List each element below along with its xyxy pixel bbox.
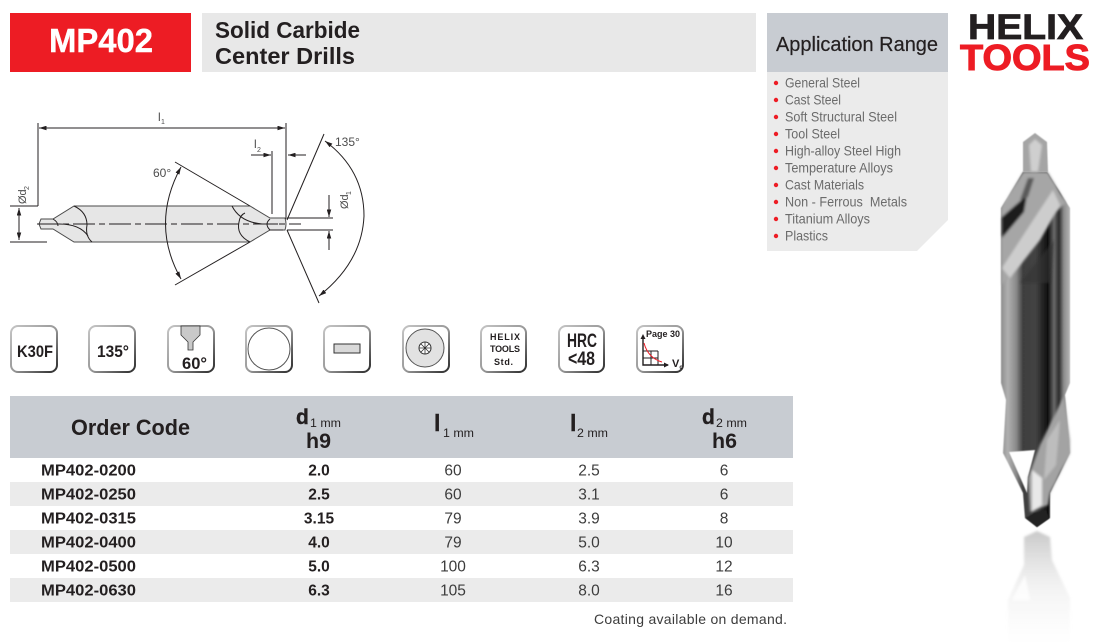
table rows: 8.0 <box>578 582 600 600</box>
icon: K30F: K30F <box>17 343 53 361</box>
dimension l1: 1 <box>161 119 165 126</box>
table header: h6 <box>712 430 737 453</box>
table rows: 3.9 <box>578 510 600 528</box>
table rows: 60 <box>444 486 462 504</box>
title banner: Center Drills <box>215 43 355 69</box>
product code badge: MP402 <box>49 22 153 59</box>
table rows: 3.1 <box>578 486 600 504</box>
footnote: Coating available on demand. <box>594 611 787 627</box>
icon: cross section <box>403 326 449 372</box>
icon: 60 degrees: 60° <box>182 355 207 373</box>
table rows: 16 <box>715 582 733 600</box>
icon: cutting speed chart, page 30: Page 30 <box>646 329 680 340</box>
table rows: 3.15 <box>304 510 334 528</box>
icon: cylindrical shank <box>324 326 370 372</box>
icon: cutting speed chart, page 30 <box>637 326 683 372</box>
angle 60 degrees: 60° <box>153 166 171 180</box>
table rows: 4.0 <box>308 534 330 552</box>
list: materials <box>774 74 907 244</box>
drill body <box>1001 172 1070 527</box>
dimension l2: l <box>254 137 257 151</box>
table header: 2 mm <box>716 416 747 430</box>
table rows: 2.5 <box>578 462 600 480</box>
drill neck <box>1023 133 1048 172</box>
table header: 1 mm <box>310 416 341 430</box>
table rows: 100 <box>440 558 466 576</box>
icon: 135 degrees: 135° <box>97 343 129 361</box>
table rows: 60 <box>444 462 462 480</box>
title banner: Solid Carbide <box>215 17 360 43</box>
table rows: 79 <box>444 534 462 552</box>
table header: h9 <box>306 430 331 453</box>
table rows: 8 <box>720 510 728 528</box>
angle 135 degrees: 135° <box>335 135 360 149</box>
angle 135 degrees <box>287 134 364 303</box>
list: materials: Soft Structural Steel <box>785 108 897 124</box>
technical drawing: center drill <box>10 110 364 303</box>
table header: 2 mm <box>577 426 608 440</box>
dimension d1 <box>287 191 353 250</box>
list: materials: Cast Materials <box>785 176 864 192</box>
dimension l1 <box>38 110 286 219</box>
table rows <box>10 462 793 602</box>
table rows: 12 <box>715 558 733 576</box>
table rows: 105 <box>440 582 466 600</box>
table header: d <box>296 406 309 429</box>
table header: l <box>434 410 440 436</box>
list: materials: High-alloy Steel High <box>785 142 901 158</box>
table: order data <box>10 396 793 602</box>
panel: application range <box>767 13 948 251</box>
table rows: MP402-0250 <box>41 486 136 504</box>
table rows: MP402-0500 <box>41 558 136 576</box>
logo: helix tools: HELIX <box>968 8 1084 47</box>
table header <box>10 396 793 458</box>
heading: application range: Application Range <box>776 33 938 56</box>
angle 60 degrees <box>153 162 250 285</box>
dimension l1: l <box>158 110 161 124</box>
icon: helix tools standard: TOOLS <box>490 344 520 354</box>
list: materials: Temperature Alloys <box>785 160 893 176</box>
icon: HRC below 48 <box>559 326 604 372</box>
table rows: MP402-0400 <box>41 534 136 552</box>
icon: 135 degrees <box>89 326 135 372</box>
dimension d2 <box>10 186 47 242</box>
table rows: MP402-0200 <box>41 462 136 480</box>
table rows: 6.3 <box>308 582 330 600</box>
dimension d1: Ød <box>339 194 351 209</box>
table header: l <box>570 410 576 436</box>
logo: helix tools <box>960 8 1090 78</box>
table rows: 6.3 <box>578 558 600 576</box>
dimension l2 <box>251 137 306 214</box>
icon: cutting speed chart, page 30: c <box>679 365 683 371</box>
table rows: 10 <box>715 534 733 552</box>
icon: helix tools standard: HELIX <box>490 332 520 342</box>
drill body <box>39 206 286 242</box>
dimension d2: 2 <box>24 186 31 190</box>
icon: cutting speed chart, page 30: V <box>672 358 679 370</box>
icon: K30F <box>11 326 57 372</box>
table rows: 79 <box>444 510 462 528</box>
icon row: properties <box>11 326 683 373</box>
white gap at tip end <box>1009 450 1035 493</box>
table rows: 2.0 <box>308 462 330 480</box>
table header: d <box>702 406 715 429</box>
dimension l2: 2 <box>257 147 261 154</box>
icon: HRC below 48: <48 <box>568 348 595 370</box>
icon: round shank <box>246 326 292 372</box>
table rows: 5.0 <box>308 558 330 576</box>
icon: helix tools standard <box>481 326 526 372</box>
list: materials: General Steel <box>785 74 860 90</box>
table header: Order Code <box>71 415 190 440</box>
list: materials: Cast Steel <box>785 92 841 108</box>
table rows: 5.0 <box>578 534 600 552</box>
drill tip <box>1026 510 1049 527</box>
list: materials: Plastics <box>785 228 828 244</box>
photo: solid carbide center drill <box>1001 133 1070 642</box>
table rows: 6 <box>720 486 728 504</box>
swirl at tip end <box>1028 396 1070 512</box>
product code badge <box>10 13 191 72</box>
list: materials: Tool Steel <box>785 126 840 142</box>
icon: HRC below 48: HRC <box>567 330 597 352</box>
table rows: 6 <box>720 462 728 480</box>
title banner <box>202 13 756 72</box>
dimension d2: Ød <box>17 189 29 204</box>
dimension d1: 1 <box>346 191 353 195</box>
icon: helix tools standard: Std. <box>494 357 513 367</box>
swirl at shank end <box>1002 172 1066 285</box>
table header: 1 mm <box>443 426 474 440</box>
list: materials: Titanium Alloys <box>785 210 870 226</box>
list: materials: Non - Ferrous Metals <box>785 194 907 210</box>
logo: helix tools: TOOLS <box>960 37 1090 78</box>
table rows: MP402-0630 <box>41 582 136 600</box>
table rows: 2.5 <box>308 486 330 504</box>
reflection <box>1008 531 1070 642</box>
centre line <box>37 223 301 225</box>
table rows: MP402-0315 <box>41 510 136 528</box>
icon: 60 degrees <box>168 326 214 373</box>
